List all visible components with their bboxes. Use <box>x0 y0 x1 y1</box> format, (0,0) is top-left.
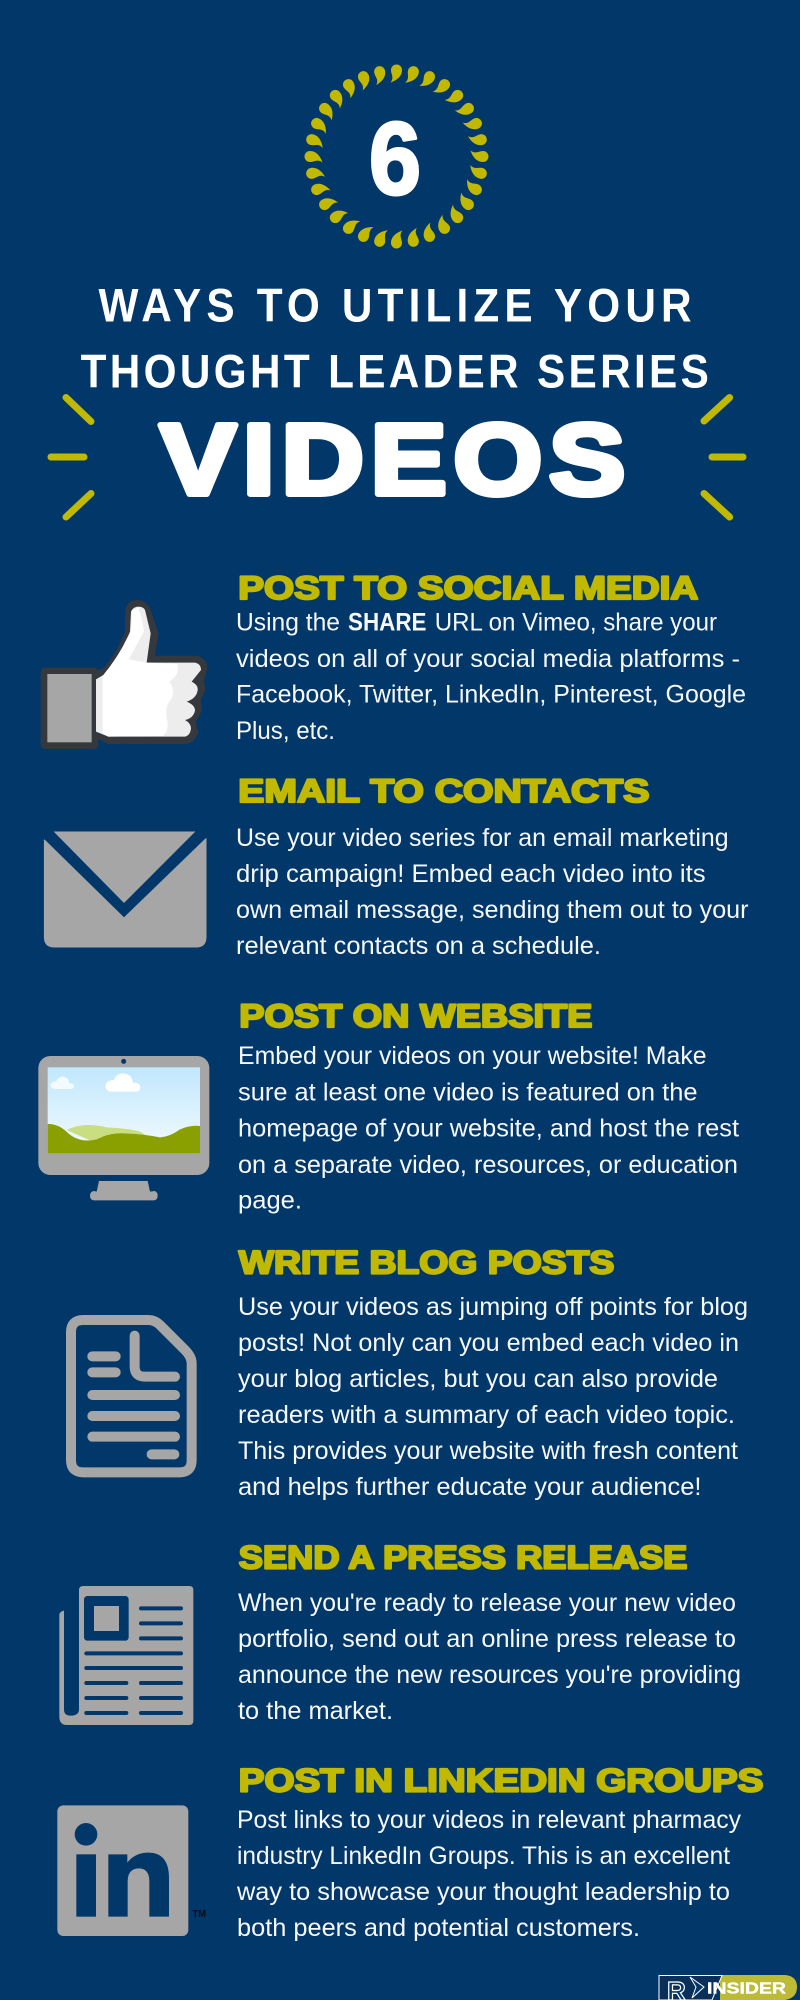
rays beside VIDEOS <box>51 398 743 517</box>
body text <box>238 1042 739 1214</box>
body text: on a separate video, resources, or education <box>238 1151 738 1179</box>
body text <box>238 1293 748 1501</box>
logo: RX Insider <box>659 1975 797 2000</box>
title: VIDEOS <box>160 404 625 515</box>
heading: WRITE BLOG POSTS <box>239 1244 614 1280</box>
panel: post to social media <box>41 570 746 749</box>
title <box>81 281 709 515</box>
panel: email to contacts <box>44 773 748 960</box>
body text: posts! Not only can you embed each video in <box>238 1329 739 1357</box>
panel: write blog posts <box>71 1244 748 1501</box>
body text: and helps further educate your audience! <box>238 1473 702 1501</box>
body text: portfolio, send out an online press release to <box>238 1625 736 1653</box>
heading: SEND A PRESS RELEASE <box>239 1540 687 1576</box>
heading: POST IN LINKEDIN GROUPS <box>239 1763 763 1799</box>
body text: announce the new resources you're providing <box>238 1661 741 1689</box>
icon: document <box>71 1320 192 1472</box>
body text <box>236 609 746 745</box>
title: WAYS TO UTILIZE YOUR <box>98 281 692 332</box>
icon: envelope <box>44 832 206 947</box>
icon: thumbs up <box>41 600 207 749</box>
body text <box>236 824 748 960</box>
body text: own email message, sending them out to your <box>236 896 748 924</box>
body text: videos on all of your social media platforms - <box>236 645 740 673</box>
body text: Post links to your videos in relevant pharmacy <box>237 1806 741 1834</box>
body text: homepage of your website, and host the rest <box>238 1115 739 1143</box>
body text: way to showcase your thought leadership to <box>236 1878 730 1906</box>
body text: When you're ready to release your new video <box>238 1589 736 1617</box>
body text: Using the <box>236 609 340 637</box>
number 6: 6 <box>369 101 421 216</box>
body text: relevant contacts on a schedule. <box>236 932 601 960</box>
body text: your blog articles, but you can also provide <box>238 1365 718 1393</box>
panel: send a press release <box>59 1540 741 1725</box>
body text: drip campaign! Embed each video into its <box>236 860 706 888</box>
body text: page. <box>238 1186 302 1214</box>
icon: linkedin logo <box>57 1805 188 1936</box>
body text: SHARE <box>348 609 426 637</box>
body text: industry LinkedIn Groups. This is an excellent <box>237 1842 730 1870</box>
icon: desktop monitor <box>38 1056 209 1200</box>
body text <box>238 1589 741 1725</box>
trademark: TM <box>192 1908 206 1920</box>
body text: Facebook, Twitter, LinkedIn, Pinterest, Google <box>236 681 746 709</box>
body text <box>236 1806 741 1942</box>
title: THOUGHT LEADER SERIES <box>81 347 709 398</box>
panel: post in linkedin groups <box>57 1763 763 1942</box>
body text: Embed your videos on your website! Make <box>238 1042 707 1070</box>
body text: Plus, etc. <box>236 717 335 745</box>
body text: to the market. <box>238 1697 393 1725</box>
panel: post on website <box>38 998 739 1214</box>
body text: both peers and potential customers. <box>237 1914 640 1942</box>
heading: EMAIL TO CONTACTS <box>238 773 649 809</box>
logo: RX Insider: INSIDER <box>707 1980 787 1998</box>
body text: This provides your website with fresh content <box>238 1437 738 1465</box>
body text: Use your video series for an email marketing <box>236 824 729 852</box>
heading: POST TO SOCIAL MEDIA <box>238 570 698 606</box>
icon: ring of drops around number <box>304 64 489 248</box>
icon: newspaper <box>59 1586 193 1725</box>
body text: URL on Vimeo, share your <box>435 609 717 637</box>
body text: Use your videos as jumping off points for blog <box>238 1293 748 1321</box>
body text: readers with a summary of each video topic. <box>238 1401 735 1429</box>
body text: sure at least one video is featured on the <box>238 1078 698 1106</box>
heading: POST ON WEBSITE <box>239 998 592 1034</box>
